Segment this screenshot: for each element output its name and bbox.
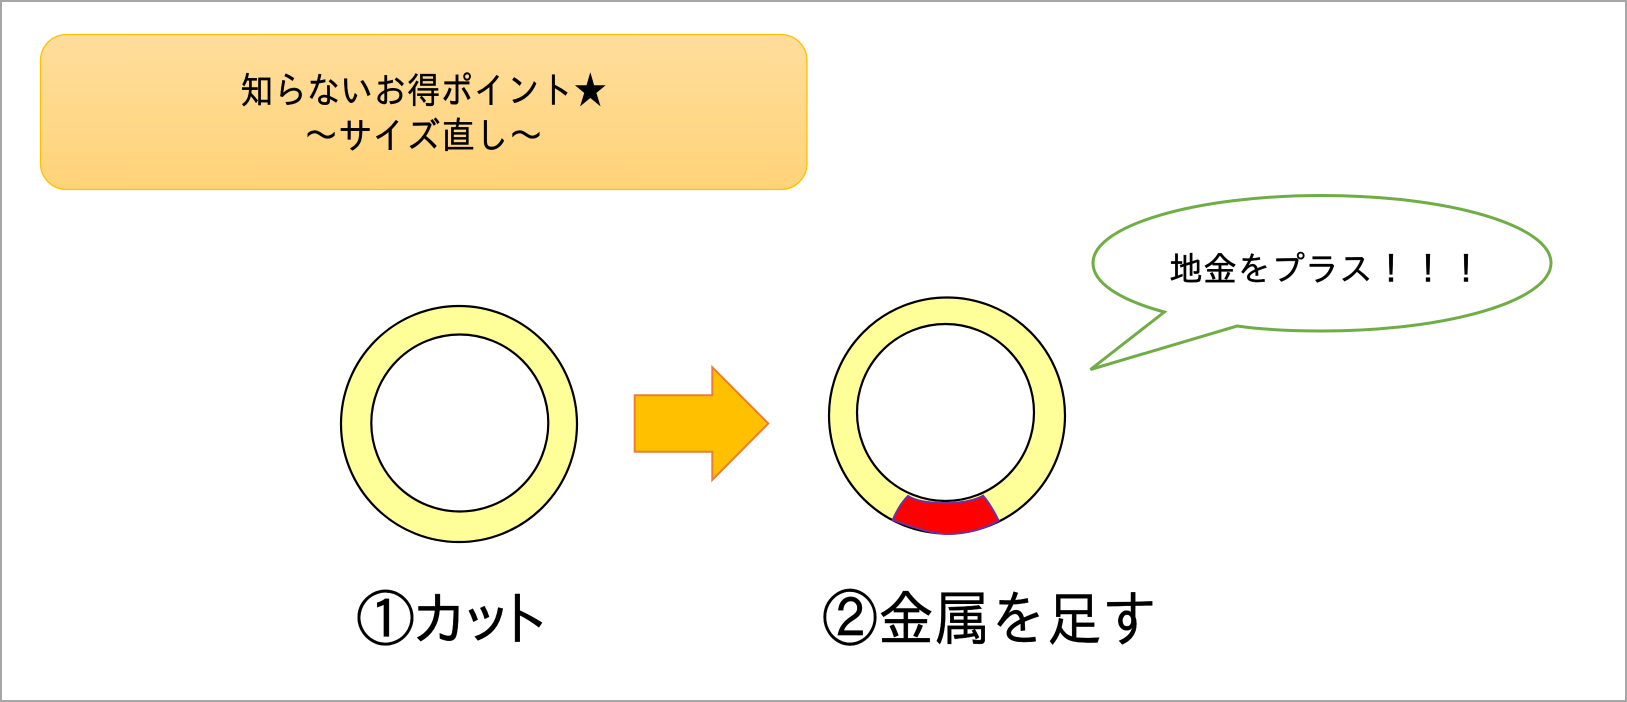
label 2: ②金属を足す: [822, 586, 1158, 653]
bubble text: ！: [1411, 251, 1445, 289]
speech bubble: [1090, 196, 1551, 370]
title text: ～サイズ直し～: [304, 116, 543, 156]
label 1: ①: [356, 587, 415, 653]
ring 2: metal added: [829, 298, 1065, 534]
ring 1: cut: [341, 306, 577, 542]
bubble text: 地金をプラス: [1169, 251, 1373, 289]
arrow: [635, 367, 768, 480]
label 1: カ: [410, 587, 469, 653]
bubble text: ！: [1449, 251, 1483, 289]
bubble text: ！: [1374, 251, 1408, 289]
label 1: ト: [494, 587, 553, 653]
label 1: ッ: [457, 587, 516, 653]
title text: [240, 70, 607, 156]
title panel: [40, 34, 807, 190]
added metal segment: [893, 496, 999, 534]
title text: 知らないお得ポイント★: [240, 70, 607, 112]
